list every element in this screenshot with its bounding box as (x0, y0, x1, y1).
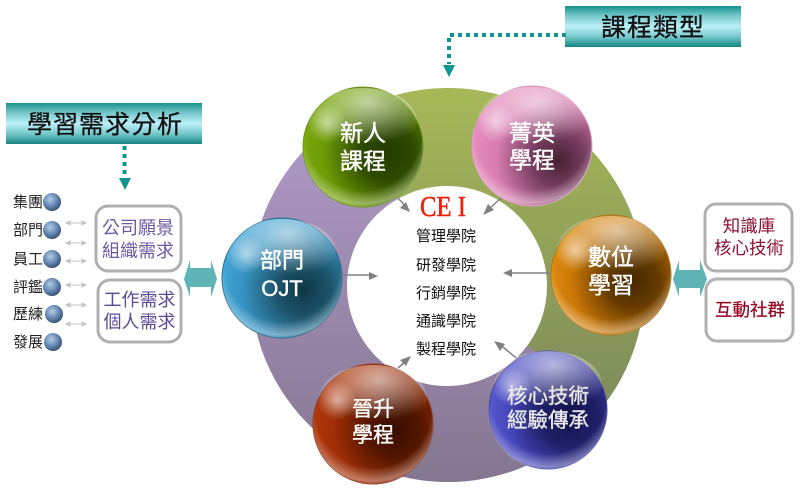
ring: course types (251, 88, 645, 482)
arrow: left double arrow (184, 260, 217, 297)
level: 集團: 集團 (13, 194, 43, 211)
box: job needs: 工作需求 (104, 290, 176, 310)
academy list: 製程學院 (416, 340, 476, 358)
level: 部門: 部門 (13, 222, 43, 239)
academy list: 行銷學院 (416, 284, 476, 302)
sphere: 菁英學程 (472, 86, 592, 206)
sphere: 新人課程: 新人 (340, 120, 386, 146)
level: 歷練: 歷練 (13, 306, 43, 323)
sphere: 新人課程: 課程 (340, 148, 386, 174)
sphere: 數位學習: 數位 (588, 244, 634, 270)
box: interactive community: 互動社群 (715, 300, 785, 320)
level: 評鑑 (13, 278, 61, 296)
heading: course types (565, 6, 741, 47)
centre: CEI academies (416, 192, 476, 358)
box: job needs (98, 280, 181, 342)
heading: learning needs analysis: 學習需求分析 (27, 111, 183, 139)
level: 發展: 發展 (13, 334, 43, 351)
box: company vision (96, 206, 181, 271)
sphere: 核心技術經驗傳承: 經驗傳承 (507, 409, 589, 432)
level: 評鑑: 評鑑 (13, 279, 43, 296)
box: company vision: 公司願景 (102, 218, 174, 238)
heading: learning needs analysis (6, 103, 202, 144)
arrow: needs analysis dotted down (119, 146, 131, 190)
level: 員工: 員工 (13, 251, 43, 268)
sphere: 部門OJT: 部門 (260, 248, 304, 273)
sphere: 數位學習 (551, 215, 671, 335)
arrows: levels to needs (66, 221, 86, 326)
box: company vision: 組織需求 (102, 241, 174, 261)
sphere: 菁英學程: 菁英 (509, 120, 555, 146)
level: 員工 (13, 250, 61, 268)
sphere: 晉升學程 (313, 364, 433, 484)
list: organisation levels (13, 193, 63, 351)
box: knowledge base (705, 204, 792, 271)
level: 發展 (13, 333, 62, 351)
arrows: spheres to centre (342, 197, 551, 368)
level: 歷練 (13, 305, 63, 323)
sphere: 核心技術經驗傳承: 核心技術 (507, 385, 589, 408)
level: 集團 (13, 193, 61, 211)
CEI title: CE I (420, 192, 466, 223)
sphere: 部門OJT: OJT (261, 276, 303, 301)
sphere: 晉升學程: 學程 (352, 424, 394, 447)
academy list (416, 227, 476, 358)
heading: course types: 課程類型 (601, 14, 705, 42)
academy list: 研發學院 (416, 256, 476, 274)
arrow: right double arrow (673, 260, 707, 297)
box: job needs: 個人需求 (104, 312, 176, 332)
sphere: 部門OJT (222, 218, 342, 338)
academy list: 管理學院 (416, 227, 476, 245)
arrow: course types dotted down (443, 35, 566, 77)
academy list: 通識學院 (416, 312, 476, 330)
box: knowledge base: 核心技術 (714, 238, 784, 258)
box: knowledge base: 知識庫 (723, 216, 775, 236)
sphere: 核心技術經驗傳承 (488, 350, 608, 470)
level: 部門 (13, 221, 61, 239)
sphere: 新人課程 (303, 87, 423, 207)
sphere: 數位學習: 學習 (588, 272, 634, 298)
box: interactive community (706, 279, 793, 341)
sphere: 菁英學程: 學程 (509, 147, 555, 173)
sphere: 晉升學程: 晉升 (352, 398, 394, 421)
